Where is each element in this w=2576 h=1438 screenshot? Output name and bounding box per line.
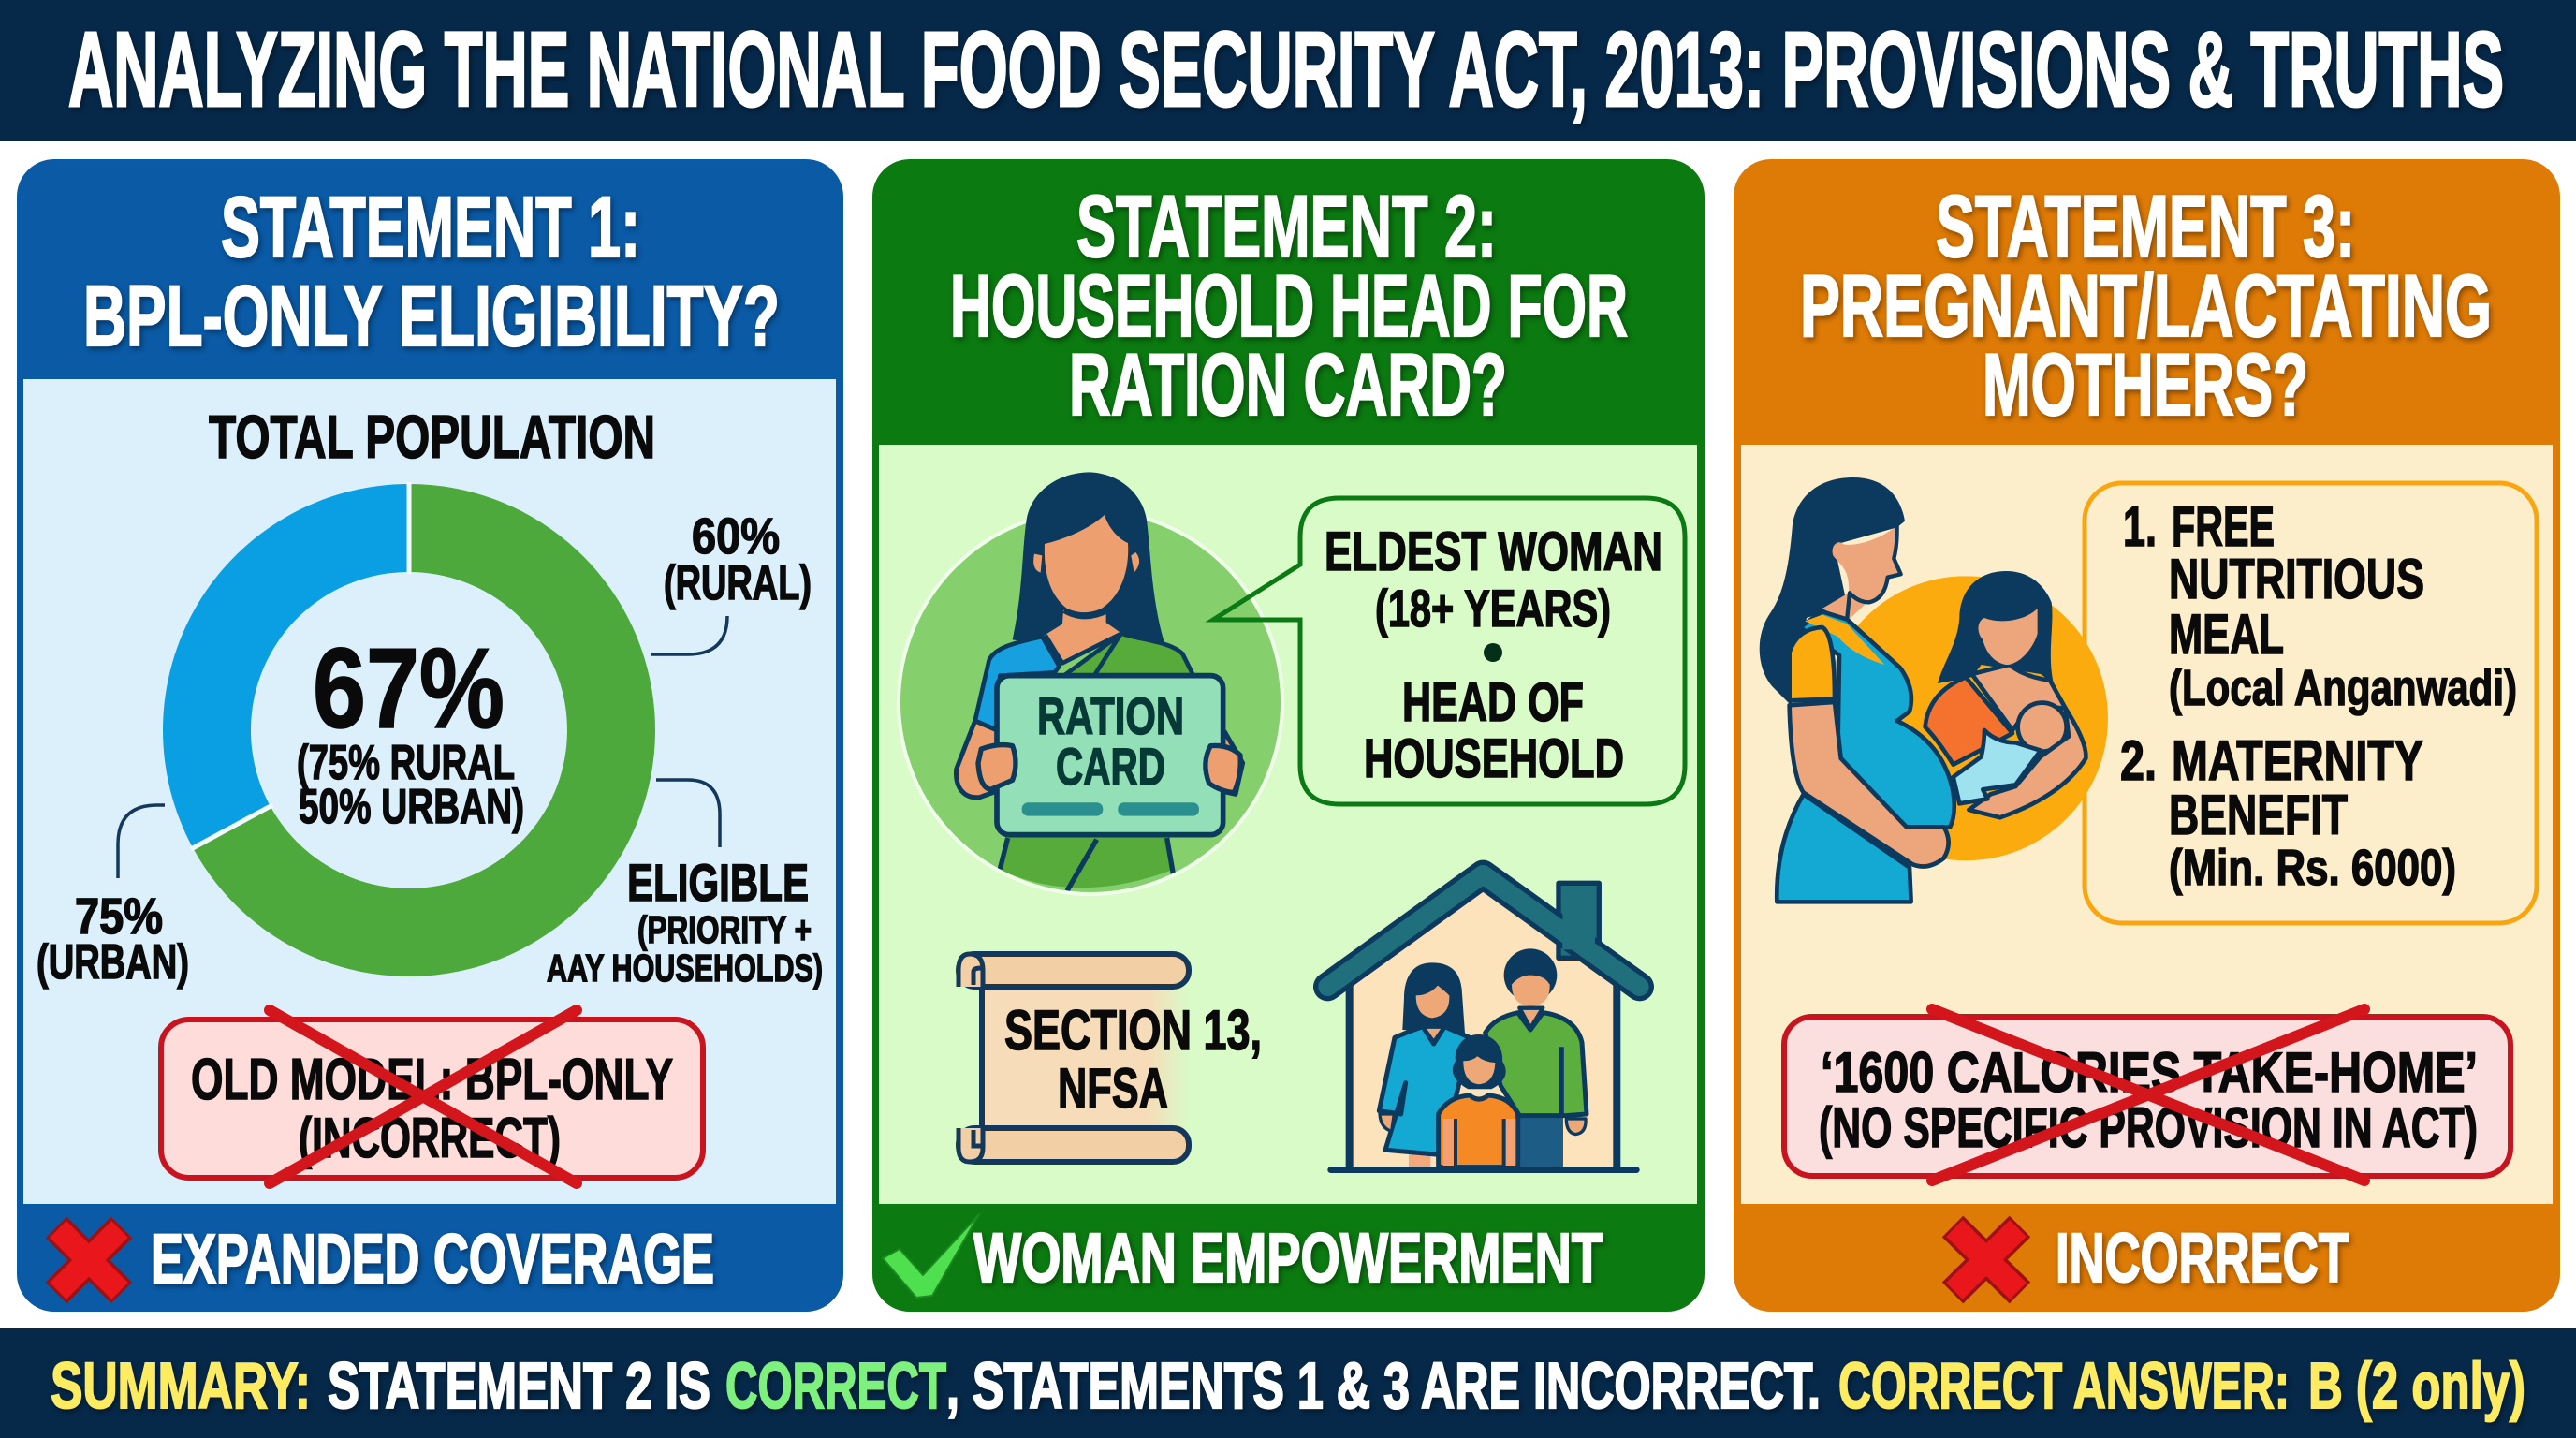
man <box>1486 948 1587 1167</box>
icon: woman holding ration card <box>897 472 1284 896</box>
heading: statement 1: STATEMENT 1: <box>221 180 640 275</box>
icon: green check <box>883 1214 979 1298</box>
verdict: woman empowerment: WOMAN EMPOWERMENT <box>973 1219 1603 1297</box>
heading: statement 2: STATEMENT 2: <box>1076 177 1497 275</box>
label: 60 percent rural: 60% <box>692 508 780 565</box>
donut centre label: (75% RURAL <box>297 736 515 790</box>
heading: statement 1 <box>83 180 780 364</box>
verdict: expanded coverage: EXPANDED COVERAGE <box>151 1220 714 1298</box>
callout: old model crossed out <box>161 1010 703 1183</box>
summary text <box>51 1349 2525 1422</box>
label: 60 percent rural <box>651 508 812 654</box>
donut centre label: 67% <box>313 624 505 752</box>
heading: statement 3: MOTHERS? <box>1983 335 2308 433</box>
summary text: CORRECT ANSWER: <box>1838 1349 2290 1422</box>
heading: statement 2: RATION CARD? <box>1069 335 1507 433</box>
info box: entitlements: 1. <box>2123 495 2157 558</box>
label: eligible households <box>547 780 823 990</box>
chart heading: TOTAL POPULATION <box>209 403 655 471</box>
summary banner <box>0 1328 2576 1438</box>
speech bubble: eldest woman head of household: ELDEST WOMAN <box>1325 521 1662 582</box>
info box: entitlements <box>2085 483 2537 923</box>
woman <box>1379 962 1470 1167</box>
label: 75 percent urban <box>37 805 189 990</box>
summary text: STATEMENT 2 IS <box>328 1349 710 1422</box>
panel: statement 2 <box>872 159 1705 1312</box>
callout: old model crossed out: (INCORRECT) <box>299 1107 561 1169</box>
speech bubble: eldest woman head of household <box>1213 498 1685 804</box>
icon: woman holding ration card: RATION <box>1037 686 1184 745</box>
icon: pregnant and lactating mothers <box>1760 477 2108 902</box>
icon: woman holding ration card: CARD <box>1056 737 1165 796</box>
icon: section 13 scroll: SECTION 13, <box>1004 999 1262 1062</box>
title banner <box>0 0 2576 141</box>
verdict: expanded coverage <box>56 1220 714 1298</box>
info box: entitlements: (Min. Rs. 6000) <box>2169 840 2456 896</box>
info box: entitlements: 2. <box>2120 729 2157 792</box>
summary text: SUMMARY: <box>51 1349 311 1422</box>
donut chart: 67 percent eligible <box>163 482 655 976</box>
info box: entitlements: MATERNITY <box>2172 729 2423 792</box>
info box: entitlements: BENEFIT <box>2169 784 2348 846</box>
info box: entitlements: NUTRITIOUS <box>2169 548 2424 610</box>
label: eligible households: ELIGIBLE <box>627 853 809 912</box>
callout: old model crossed out: OLD MODEL: BPL-ONLY <box>191 1048 673 1112</box>
heading: statement 1: BPL-ONLY ELIGIBILITY? <box>83 269 780 364</box>
callout: 1600 calories crossed out <box>1784 1009 2510 1181</box>
heading: statement 2 <box>950 177 1628 433</box>
speech bubble: eldest woman head of household: HEAD OF <box>1402 672 1584 733</box>
label: 75 percent urban: (URBAN) <box>37 935 189 990</box>
summary text: CORRECT <box>725 1349 946 1422</box>
heading: statement 3: STATEMENT 3: <box>1936 177 2355 275</box>
lactating mother <box>1925 571 2086 817</box>
label: eligible households: (PRIORITY + <box>637 908 812 951</box>
icon: section 13 scroll: NFSA <box>1058 1057 1168 1120</box>
icon: red cross <box>1953 1226 2020 1293</box>
label: 60 percent rural: (RURAL) <box>664 556 812 610</box>
speech bubble: eldest woman head of household: HOUSEHOLD <box>1364 728 1624 789</box>
child <box>1439 1034 1518 1167</box>
verdict: incorrect: INCORRECT <box>2056 1219 2349 1297</box>
icon: red cross <box>56 1227 122 1293</box>
heading: statement 2: HOUSEHOLD HEAD FOR <box>950 257 1628 355</box>
donut centre label <box>297 624 524 834</box>
summary text: , STATEMENTS 1 & 3 ARE INCORRECT. <box>946 1349 1821 1422</box>
donut centre label: 50% URBAN) <box>299 780 524 834</box>
verdict: woman empowerment <box>883 1214 1603 1298</box>
speech bubble: eldest woman head of household: (18+ YEARS) <box>1375 579 1611 638</box>
icon: section 13 scroll <box>959 954 1262 1162</box>
label: 75 percent urban: 75% <box>75 888 163 945</box>
panel: statement 1 <box>17 159 843 1312</box>
pregnant mother <box>1760 477 1954 902</box>
label: eligible households: AAY HOUSEHOLDS) <box>547 946 823 990</box>
verdict: incorrect <box>1953 1219 2349 1297</box>
icon: family in house <box>1327 874 1640 1173</box>
info box: entitlements: MEAL <box>2169 603 2284 666</box>
heading: statement 3 <box>1800 177 2492 433</box>
info box: entitlements: FREE <box>2172 495 2275 558</box>
panel: statement 3 <box>1734 159 2560 1312</box>
